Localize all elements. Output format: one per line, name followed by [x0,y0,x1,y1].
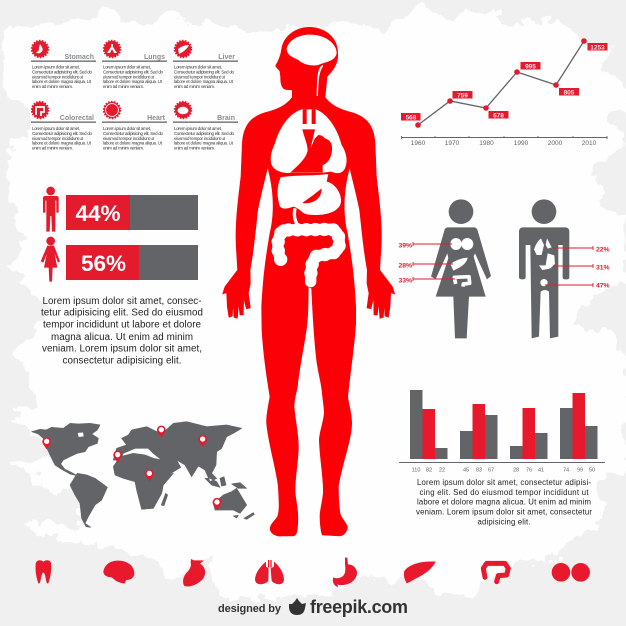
text block: chart description: veniam. Lorem ipsum dolor sit amet, consectetur [416,508,592,516]
year labels: 1990 [514,140,529,147]
chart axis [402,136,607,139]
legend item: brain: eiusmod tempor incididunt ut [174,136,226,141]
bar values: 76 [526,468,532,474]
legend item: lungs: Lorem ipsum dolor sit amet, [103,64,151,70]
legend item: liver [173,41,238,89]
bar values: 83 [476,468,482,474]
legend item: colorectal: Lorem ipsum dolor sit amet, [32,126,80,131]
percentage labels: 28% [398,262,412,270]
legend item: liver: Liver [218,54,235,61]
year labels: 2010 [582,140,597,147]
icon: intestines [483,563,508,582]
legend item: lungs: labore et dolore magna aliqua. Ut [103,79,163,84]
panel: male female organ percentages [398,199,610,338]
text block: gender description: consectetur adipisicing elit. [62,356,182,366]
legend item: colorectal: enim ad minim veniam. [32,146,73,150]
legend item: brain: Brain [217,115,235,122]
world map [32,422,254,527]
spleen [303,188,322,203]
legend item: stomach: Stomach [64,54,94,61]
year labels: 1980 [479,140,494,147]
percentage labels: 39% [398,242,412,250]
bar values: 82 [426,468,432,474]
duodenum [294,208,298,226]
legend item: brain: labore et dolore magna aliqua. Ut [174,140,234,146]
legend item: liver: Consectetur adipisicing elit. Sed do [174,70,235,74]
bar values: 74 [563,468,569,474]
female figure [431,199,491,338]
text block: gender description [41,296,203,366]
year labels: 1960 [411,140,426,147]
male figure [519,199,569,338]
icon: lungs [255,560,284,584]
value labels: 568 [406,114,417,121]
callout lines [413,242,593,287]
bar values: 67 [488,468,494,474]
legend item: stomach: labore et dolore magna aliqua. Ut [32,79,92,84]
icon: freepik logo [289,598,306,615]
legend item: heart: enim ad minim veniam. [103,146,144,150]
percentage labels: 31% [596,264,610,272]
data points [415,38,587,128]
red bars [422,393,585,459]
value labels: 805 [564,89,575,96]
percentage labels: 33% [398,278,412,284]
bar values: 41 [538,468,544,474]
bar values: 50 [589,468,595,474]
text block: gender description: magna alicua. Ut enim ad minim [51,332,193,343]
percentage labels: 22% [596,246,610,254]
legend item: colorectal: labore et dolore magna aliqua. Ut [32,140,92,146]
text block: gender description: tetur adipisicing elit. Sed do eiusmod [41,308,203,318]
icon: tooth [36,560,51,584]
legend item: brain: Lorem ipsum dolor sit amet, [174,126,222,131]
value labels [401,43,608,121]
value labels: 678 [493,112,504,119]
text block: gender description: veniam. Lorem ipsum dolor sit amet, [42,344,202,354]
bottom organ icons [36,558,590,587]
icon: man [43,187,59,232]
legend item: heart: Lorem ipsum dolor sit amet, [103,126,151,131]
legend item: colorectal [31,102,96,150]
legend item: stomach: Lorem ipsum dolor sit amet, [32,64,80,70]
location pins [42,426,221,510]
line chart [401,38,608,147]
human body figure [223,27,395,536]
icon: kidneys [552,563,590,582]
legend item: colorectal: eiusmod tempor incididunt ut [32,136,84,141]
legend item: heart: Heart [147,115,166,122]
legend item: heart: eiusmod tempor incididunt ut [103,136,155,141]
text block: chart description: adipisicing elit. [478,518,530,526]
legend item: stomach: enim ad minim veniam. [32,84,73,89]
bar: women 56% [66,245,198,280]
liver and stomach [278,174,341,215]
legend item: stomach [31,41,96,89]
text block: gender description: tempor incididunt ut labore et dolore [43,320,202,330]
credit: designed by freepik: designed by [218,603,282,615]
panel: organ legend [31,41,238,150]
continents [32,422,254,527]
percentage labels [398,242,610,290]
text block: chart description: Lorem ipsum dolor sit amet, consectetur adipisi- [417,478,591,487]
text block: chart description: labore et dolore magna alicua. Ut enim ad minim [417,498,591,506]
icon: stomach [333,558,357,587]
legend item: brain: Consectetur adipisicing elit. Sed do [174,131,235,136]
legend item: colorectal: Colorectal [60,115,94,122]
baseline [399,462,605,463]
legend item: liver: enim ad minim veniam. [174,84,215,89]
icon: brain [103,561,134,583]
panel: gender statistics [41,187,203,366]
internal organs [271,109,347,282]
bar values [412,468,595,474]
legend item: liver: eiusmod tempor incididunt ut [174,74,226,80]
bar values: 99 [577,468,583,474]
year labels: 2000 [548,140,563,147]
year labels: 1970 [445,140,460,147]
text block: gender description: Lorem ipsum dolor sit amet, consec- [42,296,202,307]
grey bars [410,390,598,459]
chart line [418,41,584,125]
legend item: liver: Lorem ipsum dolor sit amet, [174,64,222,70]
legend item: colorectal: Consectetur adipisicing elit. Sed do [32,131,93,136]
bar chart [399,390,605,526]
year labels [411,140,597,147]
legend item: brain: enim ad minim veniam. [174,146,215,150]
legend item: stomach: eiusmod tempor incididunt ut [32,74,84,80]
spinal cord [317,65,323,96]
legend item: lungs: eiusmod tempor incididunt ut [103,74,155,80]
bar: women 56%: 56% [81,251,126,276]
legend item: heart: labore et dolore magna aliqua. Ut [103,140,163,146]
legend item: lungs: Consectetur adipisicing elit. Sed do [103,70,164,74]
colon [278,229,339,282]
value labels: 759 [457,92,468,99]
text block: chart description [416,478,592,526]
trachea [303,109,316,124]
legend item: heart: Consectetur adipisicing elit. Sed do [103,131,164,136]
credit: designed by freepik: freepik.com [310,597,408,617]
legend item: brain [173,102,238,150]
legend item: lungs: enim ad minim veniam. [103,84,144,89]
icon: woman [41,237,60,282]
icon: liver [404,562,436,583]
lungs [271,109,347,173]
icon: heart [183,559,205,586]
bar values: 45 [463,468,469,474]
legend item: lungs [102,41,167,89]
percentage labels: 47% [596,282,610,290]
text block: chart description: cing elit. Sed do eiusmod tempor incididunt ut [420,488,589,497]
bar values: 110 [412,468,420,474]
legend item: stomach: Consectetur adipisicing elit. Sed do [32,70,93,74]
value labels: 995 [525,63,536,70]
body silhouette [223,27,395,536]
heart [291,129,332,172]
bar values: 28 [513,468,519,474]
credit: designed by freepik [218,597,408,617]
value labels: 1253 [590,44,605,51]
legend item: liver: labore et dolore magna aliqua. Ut [174,79,234,84]
bar: men 44% [66,195,198,230]
bar values: 22 [439,468,445,474]
legend item: lungs: Lungs [144,54,165,61]
legend item: heart [102,102,167,150]
brain [287,35,337,65]
bar: men 44%: 44% [75,201,121,226]
